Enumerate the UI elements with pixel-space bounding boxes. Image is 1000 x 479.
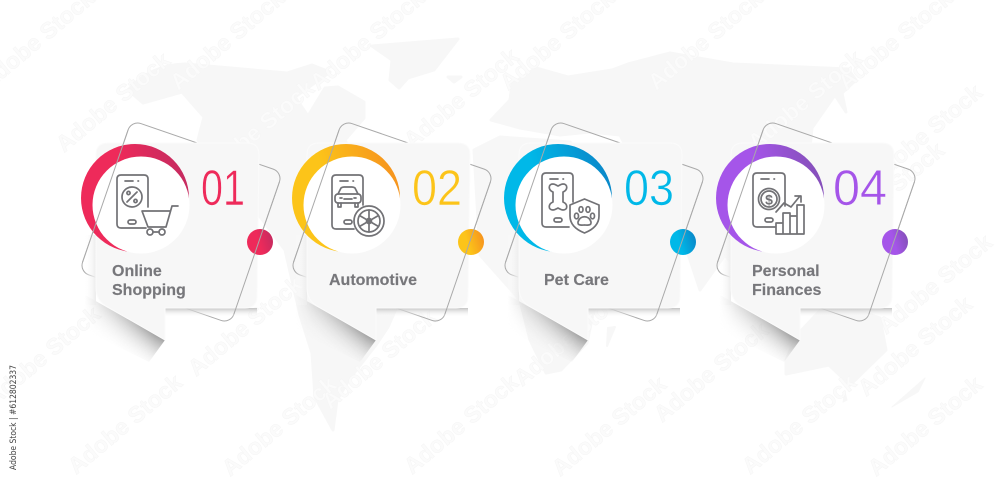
icon: phone with dollar and growth chart [753,173,804,234]
icon: phone with car and wheel [332,175,384,236]
panel: 04 Personal Finances: Finances [752,282,821,299]
watermarks: Adobe Stock [863,79,987,189]
watermarks: Adobe Stock [825,137,949,247]
watermarks: Adobe Stock [399,43,523,153]
watermarks: Adobe Stock [547,371,671,479]
dollar sign: $ [765,192,773,208]
watermarks: Adobe Stock [853,291,977,401]
panel: 01 Online Shopping: Shopping [112,282,186,299]
watermarks: Adobe Stock [743,45,867,155]
label: Automotive [329,272,417,289]
watermarks: Adobe Stock [217,371,341,479]
watermarks: Adobe Stock [183,271,307,381]
panel: 04 Personal Finances [714,120,918,362]
watermarks: Adobe Stock [195,75,319,185]
watermarks: Adobe Stock [737,369,861,479]
label: Personal [752,263,820,280]
icon: phone with bone and paw shield [542,173,599,233]
label: Pet Care [544,272,609,289]
world map background [128,39,925,430]
icon: phone with shopping cart [117,175,178,235]
watermarks: Adobe Stock [863,371,987,479]
label: Online [112,263,162,280]
watermarks: Adobe Stock [509,281,633,391]
number 03: 03 [624,160,674,216]
watermarks: Adobe Stock [873,229,997,339]
watermarks: Adobe Stock [51,47,175,157]
number 02: 02 [412,160,462,216]
number 01: 01 [201,160,245,216]
panel: 01 Online Shopping [79,120,283,362]
watermarks: Adobe Stock [63,369,187,479]
panel: 03 Pet Care [502,120,706,362]
number 04: 04 [833,160,887,216]
watermarks: Adobe Stock [399,369,523,479]
panel: 02 Automotive [290,120,494,362]
watermarks: Adobe Stock [649,317,773,427]
stock id label: Adobe Stock | #612802337 [9,365,19,470]
watermarks: Adobe Stock [317,304,441,414]
